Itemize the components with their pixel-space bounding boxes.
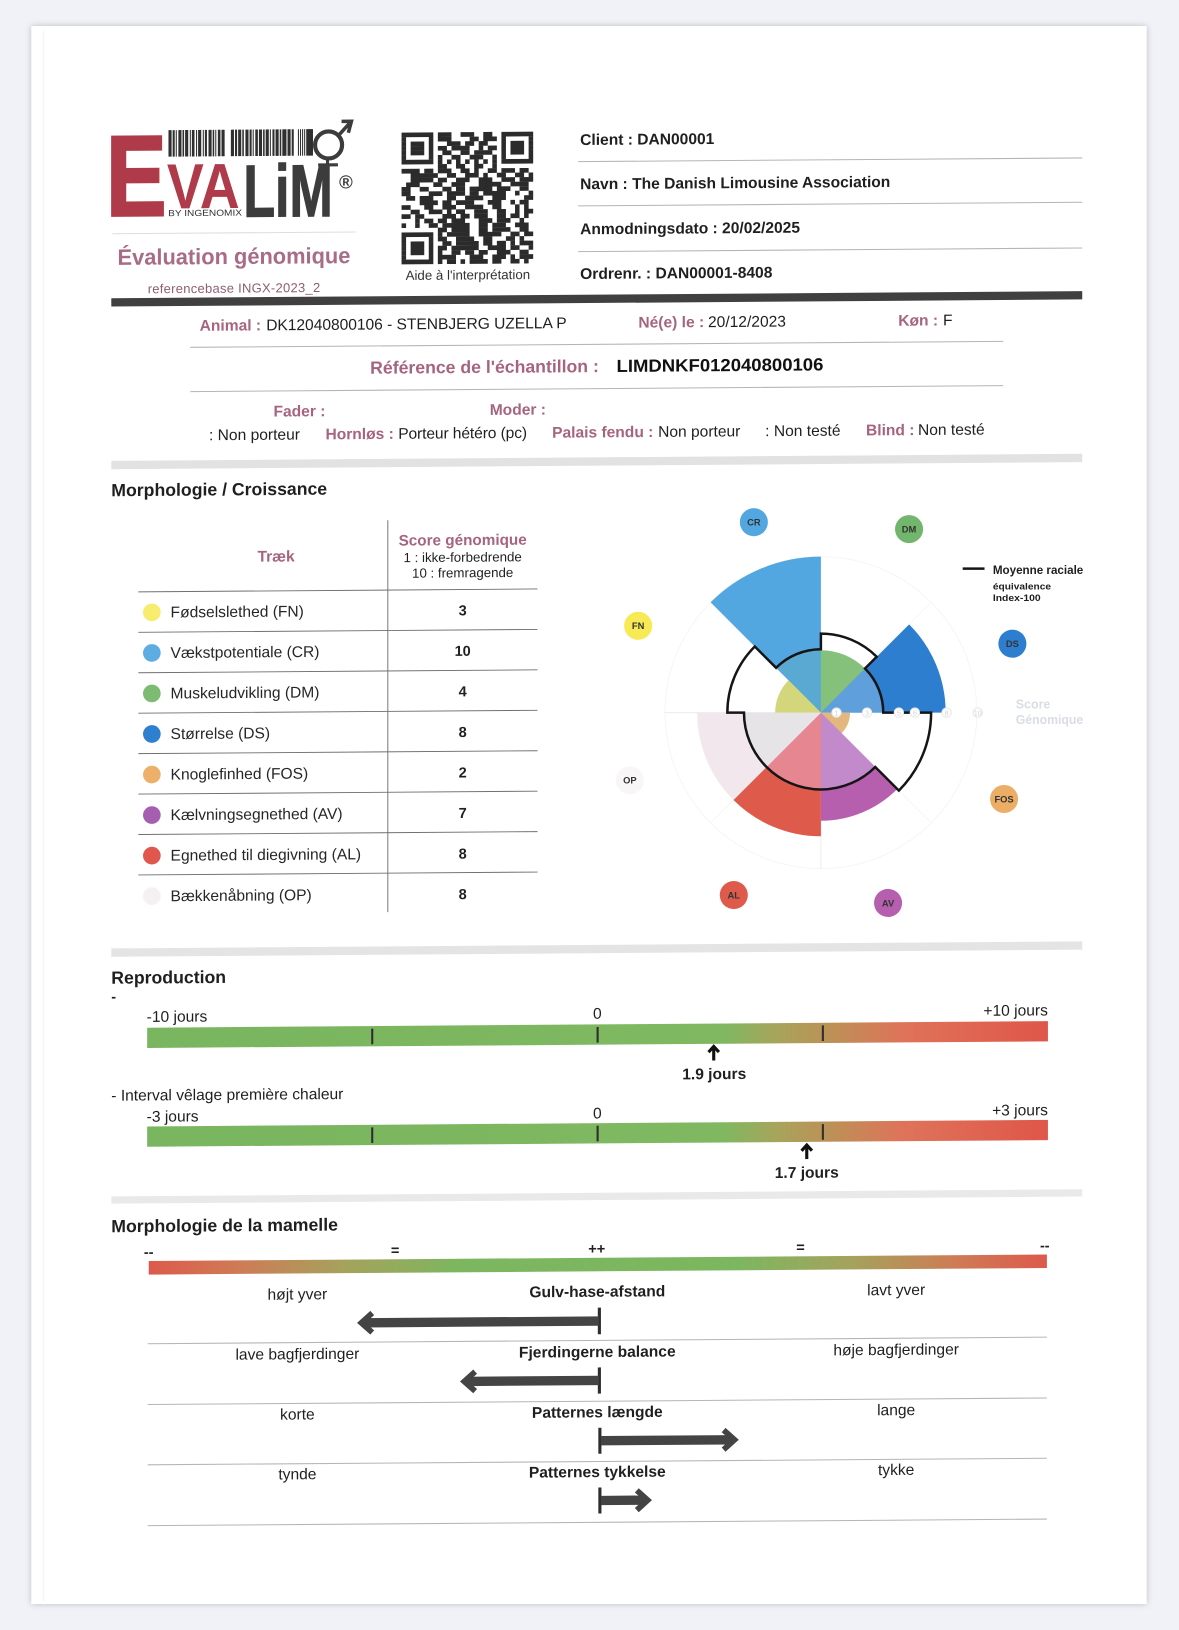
- sector: DS: [821, 624, 946, 713]
- bubble: DM: [895, 515, 923, 543]
- row: Patternes længde: lange: [877, 1402, 915, 1419]
- bubble: FOS: [990, 785, 1018, 813]
- score axis ticks: 3: [865, 709, 869, 718]
- chart grid: [664, 557, 977, 869]
- axis label: score génomique: Génomique: [1016, 713, 1083, 727]
- client information block: Ordrenr. : DAN00001-8408: [580, 265, 773, 283]
- parents and genetic status: Blind :: [866, 422, 914, 439]
- sample reference: LIMDNKF012040800106: [617, 354, 824, 376]
- udder scale: --: [144, 1245, 154, 1261]
- gauge: days scale 3: +3 jours: [992, 1102, 1048, 1120]
- QR code: [402, 134, 533, 262]
- animal information: 20/12/2023: [708, 314, 786, 331]
- row: AL: Egnethed til diegivning (AL): [171, 846, 361, 865]
- animal information: Animal :: [200, 317, 261, 335]
- row: DS: 8: [459, 725, 467, 741]
- parents and genetic status: Palais fendu :: [552, 424, 653, 442]
- logo rule: [112, 232, 356, 234]
- bubble: CR: [740, 508, 768, 536]
- logo: Evalim: BY INGENOMIX: [168, 208, 242, 218]
- row: FN: Fødselslethed (FN): [171, 603, 304, 621]
- breed average outline: [727, 634, 931, 791]
- section divider: [111, 454, 1082, 469]
- row: Patternes tykkelse: tynde: [278, 1466, 316, 1483]
- bubble: DS: DS: [1006, 639, 1019, 649]
- gauge: days scale 10: [147, 1002, 1048, 1048]
- row: OP: [143, 885, 467, 905]
- gauge: days scale 10: +10 jours: [983, 1002, 1048, 1020]
- heading: Morphologie de la mamelle: Morphologie de la mamelle: [111, 1215, 338, 1236]
- gauge: days scale 3: -3 jours: [147, 1108, 199, 1126]
- logo: Evalim: ®: [339, 171, 353, 192]
- table: genomic scores: [138, 519, 538, 914]
- parents and genetic status: Non testé: [918, 422, 985, 439]
- section divider: [111, 1189, 1082, 1204]
- row: CR: [143, 642, 471, 662]
- parents and genetic status: Non porteur: [658, 423, 740, 441]
- dash label: -: [111, 989, 116, 1005]
- udder scale: --: [1040, 1238, 1050, 1254]
- row: DM: Muskeludvikling (DM): [171, 684, 319, 703]
- gauge: days scale 10: 0: [593, 1006, 602, 1023]
- gauge: days scale 3: 0: [593, 1105, 602, 1123]
- parents and genetic status: Moder :: [490, 402, 546, 419]
- row: OP: Bækkenåbning (OP): [171, 886, 312, 905]
- row: Gulv-hase-afstand: lavt yver: [867, 1282, 925, 1299]
- bubble: AV: [874, 889, 902, 917]
- animal information: F: [943, 312, 952, 329]
- sample reference: [370, 354, 824, 378]
- bubble: FOS: FOS: [994, 794, 1014, 804]
- table: genomic scores: Træk: [257, 548, 295, 566]
- row: Patternes tykkelse: Patternes tykkelse: [529, 1464, 666, 1482]
- row: Patternes længde: Patternes længde: [532, 1404, 663, 1422]
- row: Gulv-hase-afstand: Gulv-hase-afstand: [529, 1283, 665, 1301]
- logo: Evalim: E: [106, 112, 166, 241]
- row: DS: [143, 723, 467, 743]
- axis label: score génomique: Score: [1016, 697, 1050, 711]
- marker: 1.9 jours: 1.9 jours: [682, 1066, 747, 1083]
- heading: Morphologie / Croissance: Morphologie / Croissance: [111, 479, 327, 500]
- parents and genetic status: [209, 398, 985, 444]
- reference base label: referencebase INGX-2023_2: [148, 280, 320, 296]
- sector: FOS: [821, 713, 850, 733]
- sector: AV: [821, 713, 897, 821]
- bubble: AL: [720, 881, 748, 909]
- marker: 1.9 jours: [682, 1046, 747, 1083]
- row: AV: [143, 804, 467, 824]
- row: AV: 7: [459, 806, 467, 822]
- score axis ticks: [832, 708, 982, 718]
- bubble: AV: AV: [882, 898, 895, 908]
- logo: Evalim: [106, 111, 353, 241]
- row: FOS: 2: [459, 765, 467, 781]
- animal information: Né(e) le :: [638, 314, 704, 332]
- animal information: [200, 312, 952, 335]
- parents and genetic status: : Non porteur: [209, 427, 300, 444]
- row: FOS: Knoglefinhed (FOS): [171, 766, 308, 784]
- gauge: days scale 3: [147, 1102, 1048, 1147]
- sector: AL: [733, 713, 821, 836]
- parents and genetic status: Hornløs :: [325, 426, 394, 443]
- legend: breed average: équivalence: [993, 581, 1051, 591]
- row: OP: 8: [459, 887, 467, 903]
- animal information: Køn :: [898, 312, 938, 330]
- marker: 1.7 jours: 1.7 jours: [775, 1165, 839, 1182]
- bubble: DS: [998, 630, 1026, 658]
- table: genomic scores: 10 : fremragende: [412, 565, 513, 581]
- polar chart: morphologie scores: [616, 508, 1084, 917]
- row: AL: 8: [459, 847, 467, 863]
- row: DS: Størrelse (DS): [171, 725, 270, 743]
- score axis ticks: 8: [945, 709, 949, 718]
- udder scale: ++: [588, 1242, 605, 1258]
- logo: Evalim: VA: [167, 150, 240, 222]
- marker: 1.7 jours: [775, 1145, 839, 1182]
- row: Fjerdingerne balance: lave bagfjerdinger: [235, 1346, 359, 1364]
- legend: breed average: Index-100: [993, 593, 1041, 603]
- row: AV: Kælvningsegnethed (AV): [171, 806, 343, 824]
- label: Interval vêlage première chaleur: - Interval vêlage première chaleur: [111, 1086, 343, 1105]
- sector: CR: [711, 557, 821, 713]
- row: DM: [143, 682, 468, 703]
- parents and genetic status: Porteur hétéro (pc): [398, 425, 527, 443]
- logo: Evalim: LiM: [243, 149, 333, 233]
- client information block: Client : DAN00001: [580, 131, 715, 149]
- udder scale: =: [796, 1240, 805, 1256]
- row: AL: [143, 844, 467, 865]
- row: Fjerdingerne balance: høje bagfjerdinger: [833, 1341, 959, 1359]
- sector: FN: [775, 680, 821, 713]
- bubble: AL: AL: [728, 890, 740, 900]
- row: Fjerdingerne balance: [235, 1341, 959, 1396]
- parents and genetic status: Fader :: [273, 403, 325, 421]
- bubble: OP: OP: [623, 776, 637, 786]
- row: Gulv-hase-afstand: [268, 1281, 925, 1337]
- table: genomic scores: Score génomique: [399, 532, 527, 550]
- row: Patternes tykkelse: [278, 1462, 914, 1516]
- client information block: [578, 128, 1082, 283]
- row: FN: 3: [459, 603, 467, 619]
- row: CR: 10: [455, 644, 471, 660]
- bubble: DM: DM: [902, 524, 917, 534]
- client information block: Navn : The Danish Limousine Association: [580, 174, 890, 193]
- animal information: DK12040800106 - STENBJERG UZELLA P: [266, 315, 567, 334]
- client information block: Anmodningsdato : 20/02/2025: [580, 220, 800, 238]
- bubble: FN: FN: [632, 621, 645, 631]
- legend: breed average: Moyenne raciale: [993, 563, 1084, 577]
- parents and genetic status: : Non testé: [765, 423, 841, 440]
- bubble: CR: CR: [747, 517, 761, 527]
- bubble: FN: [624, 612, 652, 640]
- row: Patternes tykkelse: tykke: [878, 1462, 914, 1479]
- score axis ticks: 1: [834, 709, 839, 718]
- axis label: score génomique: [1016, 697, 1083, 727]
- legend: breed average: [963, 563, 1084, 603]
- sector: OP: [697, 713, 821, 800]
- table: genomic scores: 1 : ikke-forbedrende: [404, 549, 522, 565]
- sector: DM: [821, 650, 865, 713]
- heading: Évaluation génomique: Évaluation génomique: [118, 243, 350, 270]
- QR caption: Aide à l'interprétation: [406, 267, 530, 283]
- row: Fjerdingerne balance: Fjerdingerne balance: [519, 1343, 676, 1362]
- bubble: OP: [616, 766, 644, 794]
- udder scale: [144, 1238, 1050, 1275]
- section divider: [111, 941, 1082, 957]
- document content: [106, 105, 1082, 1526]
- heading: Reproduction: Reproduction: [111, 967, 226, 988]
- row: FOS: [143, 763, 467, 784]
- row: Patternes længde: korte: [280, 1406, 315, 1424]
- udder scale: =: [391, 1243, 399, 1259]
- row: FN: [143, 601, 467, 622]
- gauge: days scale 10: -10 jours: [147, 1009, 207, 1026]
- score axis ticks: 10: [974, 709, 982, 718]
- header bar: [111, 291, 1082, 307]
- row: Gulv-hase-afstand: højt yver: [268, 1286, 327, 1304]
- row: CR: Vækstpotentiale (CR): [171, 644, 319, 662]
- row: DM: 4: [459, 684, 468, 700]
- sample reference: Référence de l'échantillon :: [370, 356, 599, 378]
- row: Patternes længde: [280, 1402, 915, 1456]
- score axis ticks: 6: [913, 709, 917, 718]
- score axis ticks: 5: [897, 709, 901, 718]
